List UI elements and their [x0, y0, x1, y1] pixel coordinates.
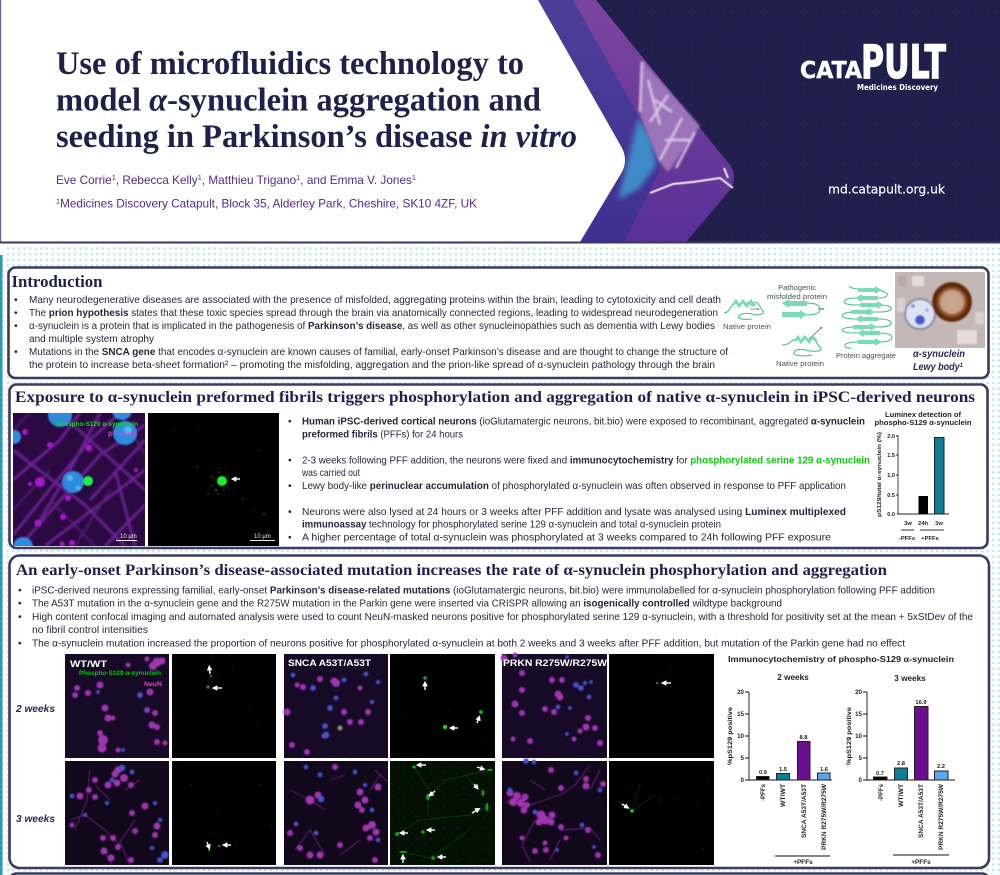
heading: immunocytochemistry chart: Immunocytochemistry of phospho-S129 α-synuclein: [728, 654, 954, 664]
chart: 3 weeks: +PFFs: [911, 859, 931, 866]
chart: 3 weeks: 0.7: [876, 771, 884, 777]
authors: , and Emma V. Jones: [300, 173, 412, 187]
chart: Luminex: 24h: [918, 521, 928, 527]
protein aggregate: [842, 286, 892, 348]
authors: , Matthieu Trigano: [202, 173, 296, 187]
heading: mutation: An early-onset Parkinson’s disease-associated mutation increases the rate of α-synuclein phosphorylation and aggregation: [16, 562, 887, 579]
chart: 2 weeks: 2 weeks: [777, 673, 809, 682]
micrograph: WT/WT 2 weeks green: [172, 654, 276, 758]
micrograph: WT/WT 3 weeks merged: [65, 761, 169, 865]
title: seeding in Parkinson’s disease in vitro: [56, 119, 577, 155]
micrograph: SNCA 3 weeks merged: [284, 761, 388, 865]
logo: Catapult: PULT: [861, 35, 946, 89]
title: Use of microfluidics technology to: [56, 46, 524, 82]
chart: 2 weeks: 0.9: [759, 770, 768, 776]
mutation bullets: High content confocal imaging and automated analysis were used to count NeuN-masked neurons positive for phosphorylated serine 129 α-synuclein, with a threshold for positivity set at the mean + 5xStDev of the: [32, 612, 973, 623]
chart: 3 weeks: WT/WT: [898, 784, 905, 807]
panel: PFF exposure: [7, 384, 988, 557]
chart: 2 weeks: PRKN R275W/R275W: [821, 783, 828, 850]
authors: 1: [296, 173, 300, 182]
authors: , Rebecca Kelly: [116, 173, 198, 187]
affiliation: Medicines Discovery Catapult, Block 35, Alderley Park, Cheshire, SK10 4ZF, UK: [60, 196, 477, 210]
mutation bullets: no fibril control intensities: [32, 625, 148, 636]
chart: 3 weeks: 0: [859, 777, 863, 784]
micrograph: merged: Phospho-S129 α-synuclein: [56, 422, 138, 428]
intro bullets: The prion hypothesis states that these toxic species spread through the brain via anatomically connected regions, leading to widespread neurodegeneration: [29, 308, 718, 319]
micrograph: merged: [13, 413, 145, 546]
mutation bullets: iPSC-derived neurons expressing familial, early-onset Parkinson’s disease-related mutations (ioGlutamatergic neurons, bit.bio) were immunolabelled for α-synuclein phosphorylation following PFF addition: [32, 586, 935, 596]
diagram: protein misfolding: misfolded protein: [767, 292, 827, 301]
chart: 2 weeks: -PFFs: [760, 784, 767, 801]
chart: Luminex: 3w: [935, 521, 943, 527]
chart: 2 weeks: 10: [737, 733, 745, 740]
panel: introduction: [8, 268, 988, 378]
heading: PFF exposure: Exposure to α-synuclein preformed fibrils triggers phosphorylation and aggregation of native α-synuclein in iPSC-derived neurons: [15, 389, 975, 406]
authors: [56, 173, 477, 210]
row label: 3 weeks: 3 weeks: [16, 813, 55, 825]
chart: Luminex: pS129/total α-synuclein (%): [877, 432, 883, 517]
chart: Luminex: Luminex detection of: [885, 410, 961, 419]
intro bullets: [14, 295, 728, 371]
authors: 1: [112, 173, 116, 182]
chart: 3 weeks: 16.9: [915, 700, 927, 706]
authors: 1: [198, 173, 202, 182]
authors: 1: [412, 173, 416, 182]
misfolded protein: Pathogenic: [778, 283, 816, 292]
mutation bullets: •: [18, 598, 22, 610]
chart: 3 weeks: 2.8: [897, 761, 906, 767]
intro bullets: and multiple system atrophy: [29, 334, 155, 345]
intro bullets: •: [14, 347, 18, 358]
PFF bullets: was carried out: [301, 468, 360, 479]
image: Lewy body: [895, 272, 985, 348]
PFF bullets: Human iPSC-derived cortical neurons (ioGlutamatergic neurons, bit.bio) were exposed to recombinant, aggregated α-synuclein: [302, 416, 865, 428]
authors: Eve Corrie: [56, 173, 113, 187]
mutation bullets: •: [18, 638, 22, 650]
micrograph: PRKN 2 weeks green: [609, 654, 714, 758]
micrograph: SNCA 3 weeks green: [390, 761, 495, 865]
logo: Catapult: CATA: [800, 58, 862, 84]
PFF bullets: •: [288, 532, 292, 544]
intro bullets: •: [14, 308, 18, 319]
chart: 3 weeks: 3 weeks: [894, 674, 926, 683]
chart: Luminex: 1.0: [887, 473, 895, 479]
micrograph: PRKN 3 weeks green: [609, 761, 714, 865]
chart: 3 weeks: SNCA A53T/A53T: [918, 784, 925, 838]
micrograph: PRKN 2 weeks merged: PRKN R275W/R275W: [503, 658, 607, 669]
header chevron art: [538, 0, 734, 242]
chart: 3 weeks: [846, 674, 955, 866]
chart: 2 weeks: +PFFs: [793, 859, 813, 866]
intro bullets: the protein to increase beta-sheet formation² – promoting the misfolding, aggregation and the prion-like spread of α-synuclein pathology through the brain: [29, 360, 715, 371]
website: md.catapult.org.uk: [828, 182, 945, 196]
intro bullets: Mutations in the SNCA gene that encodes α-synuclein are known causes of familial, early-onset Parkinson’s disease and are thought to change the structure of: [29, 347, 728, 358]
micrograph: SNCA 2 weeks merged: [284, 654, 388, 758]
micrograph: PRKN 3 weeks merged: [502, 758, 607, 865]
PFF bullets: [288, 416, 870, 544]
PFF bullets: •: [288, 456, 292, 466]
chart: Luminex: 0.5: [887, 493, 895, 499]
chart: 3 weeks: PRKN R275W/R275W: [938, 783, 945, 850]
affiliation: 1: [56, 196, 60, 206]
chart: 2 weeks: SNCA A53T/A53T: [801, 784, 808, 838]
chart: 3 weeks: 2.2: [937, 764, 945, 770]
chart: Luminex: 1.5: [887, 453, 895, 459]
chart: 2 weeks: 1.5: [779, 767, 788, 773]
micrograph: WT/WT 2 weeks merged: [65, 654, 169, 758]
chart: 2 weeks: 0: [741, 777, 745, 784]
PFF bullets: Lewy body-like perinuclear accumulation of phosphorylated α-synuclein was often observed in response to PFF application: [302, 481, 846, 492]
chart: 3 weeks: 10: [855, 733, 863, 740]
chart: 2 weeks: 20: [737, 689, 745, 696]
micrograph: SNCA 2 weeks merged: SNCA A53T/A53T: [288, 658, 371, 669]
chart: 2 weeks: 1.6: [820, 767, 829, 773]
intro bullets: α-synuclein is a protein that is implicated in the pathogenesis of Parkinson’s disease, as well as other synucleinopathies such as dementia with Lewy bodies: [29, 321, 715, 332]
intro bullets: Many neurodegenerative diseases are associated with the presence of misfolded, aggregating proteins within the brain, leading to cytotoxicity and cell death: [29, 295, 721, 306]
mutation bullets: The A53T mutation in the α-synuclein gene and the R275W mutation in the Parkin gene were inserted via CRISPR allowing an isogenically controlled wildtype background: [32, 598, 782, 610]
native protein 2: [782, 337, 821, 356]
PFF bullets: A higher percentage of total α-synuclein was phosphorylated at 3 weeks compared to 24h following PFF exposure: [302, 532, 831, 544]
micrograph: PRKN 2 weeks merged: [501, 653, 607, 758]
row label: 2 weeks: 2 weeks: [15, 703, 55, 715]
chart: 2 weeks: [727, 673, 832, 866]
chart: 3 weeks: %pS129 positive: [846, 707, 853, 765]
chart: 2 weeks: 15: [737, 711, 745, 718]
diagram: protein misfolding: Native protein: [723, 322, 771, 331]
mutation bullets: •: [18, 612, 22, 623]
chart: Luminex: 0.0: [887, 512, 895, 518]
intro bullets: •: [14, 295, 18, 306]
PFF bullets: immunoassay technology for phosphorylated serine 129 α-synuclein and total α-synuclein protein: [302, 520, 721, 530]
mutation bullets: [18, 586, 973, 650]
micrograph: phospho-S129: 10 µm: [254, 534, 271, 540]
micrograph: merged: 10 µm: [120, 534, 137, 540]
chart: 3 weeks: 5: [859, 755, 863, 762]
panel: early-onset mutation: [10, 556, 989, 868]
logo: Catapult: [800, 35, 946, 92]
caption: Lewy body: α-synuclein: [913, 349, 965, 360]
chart: 3 weeks: -PFFs: [878, 784, 885, 801]
intro bullets: •: [14, 321, 18, 332]
PFF bullets: •: [288, 507, 292, 518]
PFF bullets: 2-3 weeks following PFF addition, the neurons were fixed and immunocytochemistry for phosphorylated serine 129 α-synuclein: [302, 456, 870, 466]
chart: 2 weeks: %pS129 positive: [727, 707, 734, 765]
mutation bullets: •: [18, 586, 22, 596]
micrograph: WT/WT 2 weeks merged: Phospho-S129 α-synuclein: [79, 671, 161, 677]
micrograph: merged: β-tubulin: [108, 432, 137, 438]
micrograph: WT/WT 2 weeks merged: WT/WT: [70, 659, 107, 670]
chart: 2 weeks: WT/WT: [780, 784, 787, 807]
chart: Luminex: 3w: [904, 521, 912, 527]
chart: Luminex: -PFFs: [899, 536, 915, 542]
caption: Lewy body: [913, 349, 965, 373]
title: model α-synuclein aggregation and: [56, 82, 541, 118]
chart: Luminex: [874, 410, 972, 542]
chart: 2 weeks: 8.8: [799, 735, 808, 741]
chart: 3 weeks: 15: [855, 711, 863, 718]
caption: Lewy body: 1: [960, 362, 963, 369]
micrograph: SNCA 2 weeks green: [390, 654, 495, 758]
diagram: protein misfolding: [723, 283, 896, 368]
chart: 3 weeks: 20: [855, 689, 863, 696]
chart: Luminex: phospho-S129 α-synuclein: [874, 418, 972, 427]
PFF bullets: preformed fibrils (PFFs) for 24 hours: [302, 430, 463, 440]
panel: next section (cropped): [10, 874, 989, 875]
diagram: protein misfolding: Native protein: [776, 359, 824, 368]
micrograph: phospho-S129: [148, 413, 279, 546]
micrograph: WT/WT 2 weeks merged: NeuN: [144, 682, 162, 688]
chart: Luminex: +PFFs: [921, 536, 939, 542]
micrograph: WT/WT 3 weeks green: [172, 761, 276, 865]
header banner: [0, 0, 1000, 244]
logo: Catapult: Medicines Discovery: [857, 83, 938, 92]
heading: introduction: Introduction: [12, 272, 102, 291]
native protein 1: [724, 301, 764, 319]
PFF bullets: Neurons were also lysed at 24 hours or 3 weeks after PFF addition and lysate was analysed using Luminex multiplexed: [302, 507, 846, 518]
PFF bullets: •: [288, 416, 292, 428]
chart: Luminex: 2.0: [887, 434, 895, 440]
title: [56, 46, 577, 155]
chart: 2 weeks: 5: [741, 755, 745, 762]
diagram: protein misfolding: Protein aggregate: [836, 351, 896, 360]
PFF bullets: •: [288, 481, 292, 492]
caption: Lewy body: Lewy body: [913, 362, 965, 373]
mutation bullets: The α-synuclein mutation increased the proportion of neurons positive for phosphorylated α-synuclein at both 2 weeks and 3 weeks after PFF addition, but mutation of the Parkin gene had no effect: [32, 638, 905, 650]
